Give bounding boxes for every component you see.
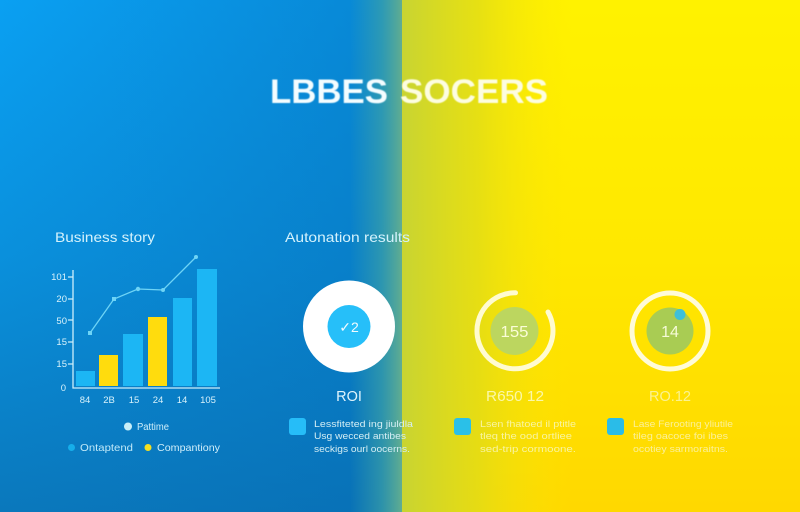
note: R0.12 bbox=[607, 418, 733, 455]
y axis labels: 20 bbox=[56, 294, 67, 305]
metric: 155 ring bbox=[477, 293, 553, 369]
note: ROI: seckigs ourl oocerns. bbox=[314, 444, 410, 455]
x axis labels: 14 bbox=[177, 395, 187, 406]
note: R0.12: ocotiey sarmoraitns. bbox=[633, 444, 728, 455]
metric label: R0.12: RO.12 bbox=[649, 389, 691, 405]
y axis labels: 50 bbox=[56, 316, 67, 327]
note: R0.12: tileg oacoce foi ibes bbox=[633, 431, 728, 442]
note: R650 12: Lsen fhatoed il ptitle bbox=[480, 419, 576, 430]
chart legend: Pattime bbox=[137, 422, 169, 433]
note: ROI bbox=[289, 418, 414, 455]
metric: 155 ring: 155 bbox=[500, 324, 529, 341]
x axis labels bbox=[80, 395, 216, 406]
metric: ROI donut: ✓2 bbox=[339, 319, 359, 335]
y axis labels: 15 bbox=[56, 359, 67, 370]
y axis labels: 0 bbox=[61, 383, 66, 394]
y axis labels: 15 bbox=[56, 337, 67, 348]
trend line bbox=[88, 255, 198, 335]
chart legend bbox=[68, 422, 221, 454]
x axis labels: 105 bbox=[200, 395, 216, 406]
bar and line chart bbox=[51, 255, 220, 406]
x axis labels: 2B bbox=[103, 395, 115, 406]
metric label: R650 12: R650 12 bbox=[486, 389, 544, 405]
bars bbox=[76, 269, 217, 386]
axes bbox=[68, 270, 220, 388]
metric: 14 ring: 14 bbox=[661, 324, 679, 341]
chart legend: Ontaptend bbox=[80, 442, 133, 454]
note: R650 12 bbox=[454, 418, 576, 455]
metric: ROI donut bbox=[303, 280, 395, 372]
note: ROI: Lessfiteted ing jiuldla bbox=[314, 419, 414, 430]
chart legend: Compantiony bbox=[157, 442, 221, 454]
heading: automation results: Autonation results bbox=[285, 229, 410, 245]
x axis labels: 24 bbox=[153, 395, 163, 406]
y axis labels: 101 bbox=[51, 272, 67, 283]
metric: 14 ring bbox=[632, 293, 708, 369]
x axis labels: 15 bbox=[129, 395, 139, 406]
title: LBBES bbox=[270, 73, 388, 111]
title bbox=[270, 73, 548, 111]
metric label: ROI: ROI bbox=[336, 389, 362, 405]
x axis labels: 84 bbox=[80, 395, 90, 406]
heading: business story: Business story bbox=[55, 229, 155, 245]
note: R0.12: Lase Ferooting yliutile bbox=[633, 419, 733, 430]
title: SOCERS bbox=[400, 73, 548, 111]
note: R650 12: tleq the ood ortliee bbox=[480, 431, 572, 442]
y axis labels bbox=[51, 272, 67, 394]
note: R650 12: sed-trip cormoone. bbox=[480, 444, 576, 455]
note: ROI: Usg wecced antibes bbox=[314, 431, 406, 442]
